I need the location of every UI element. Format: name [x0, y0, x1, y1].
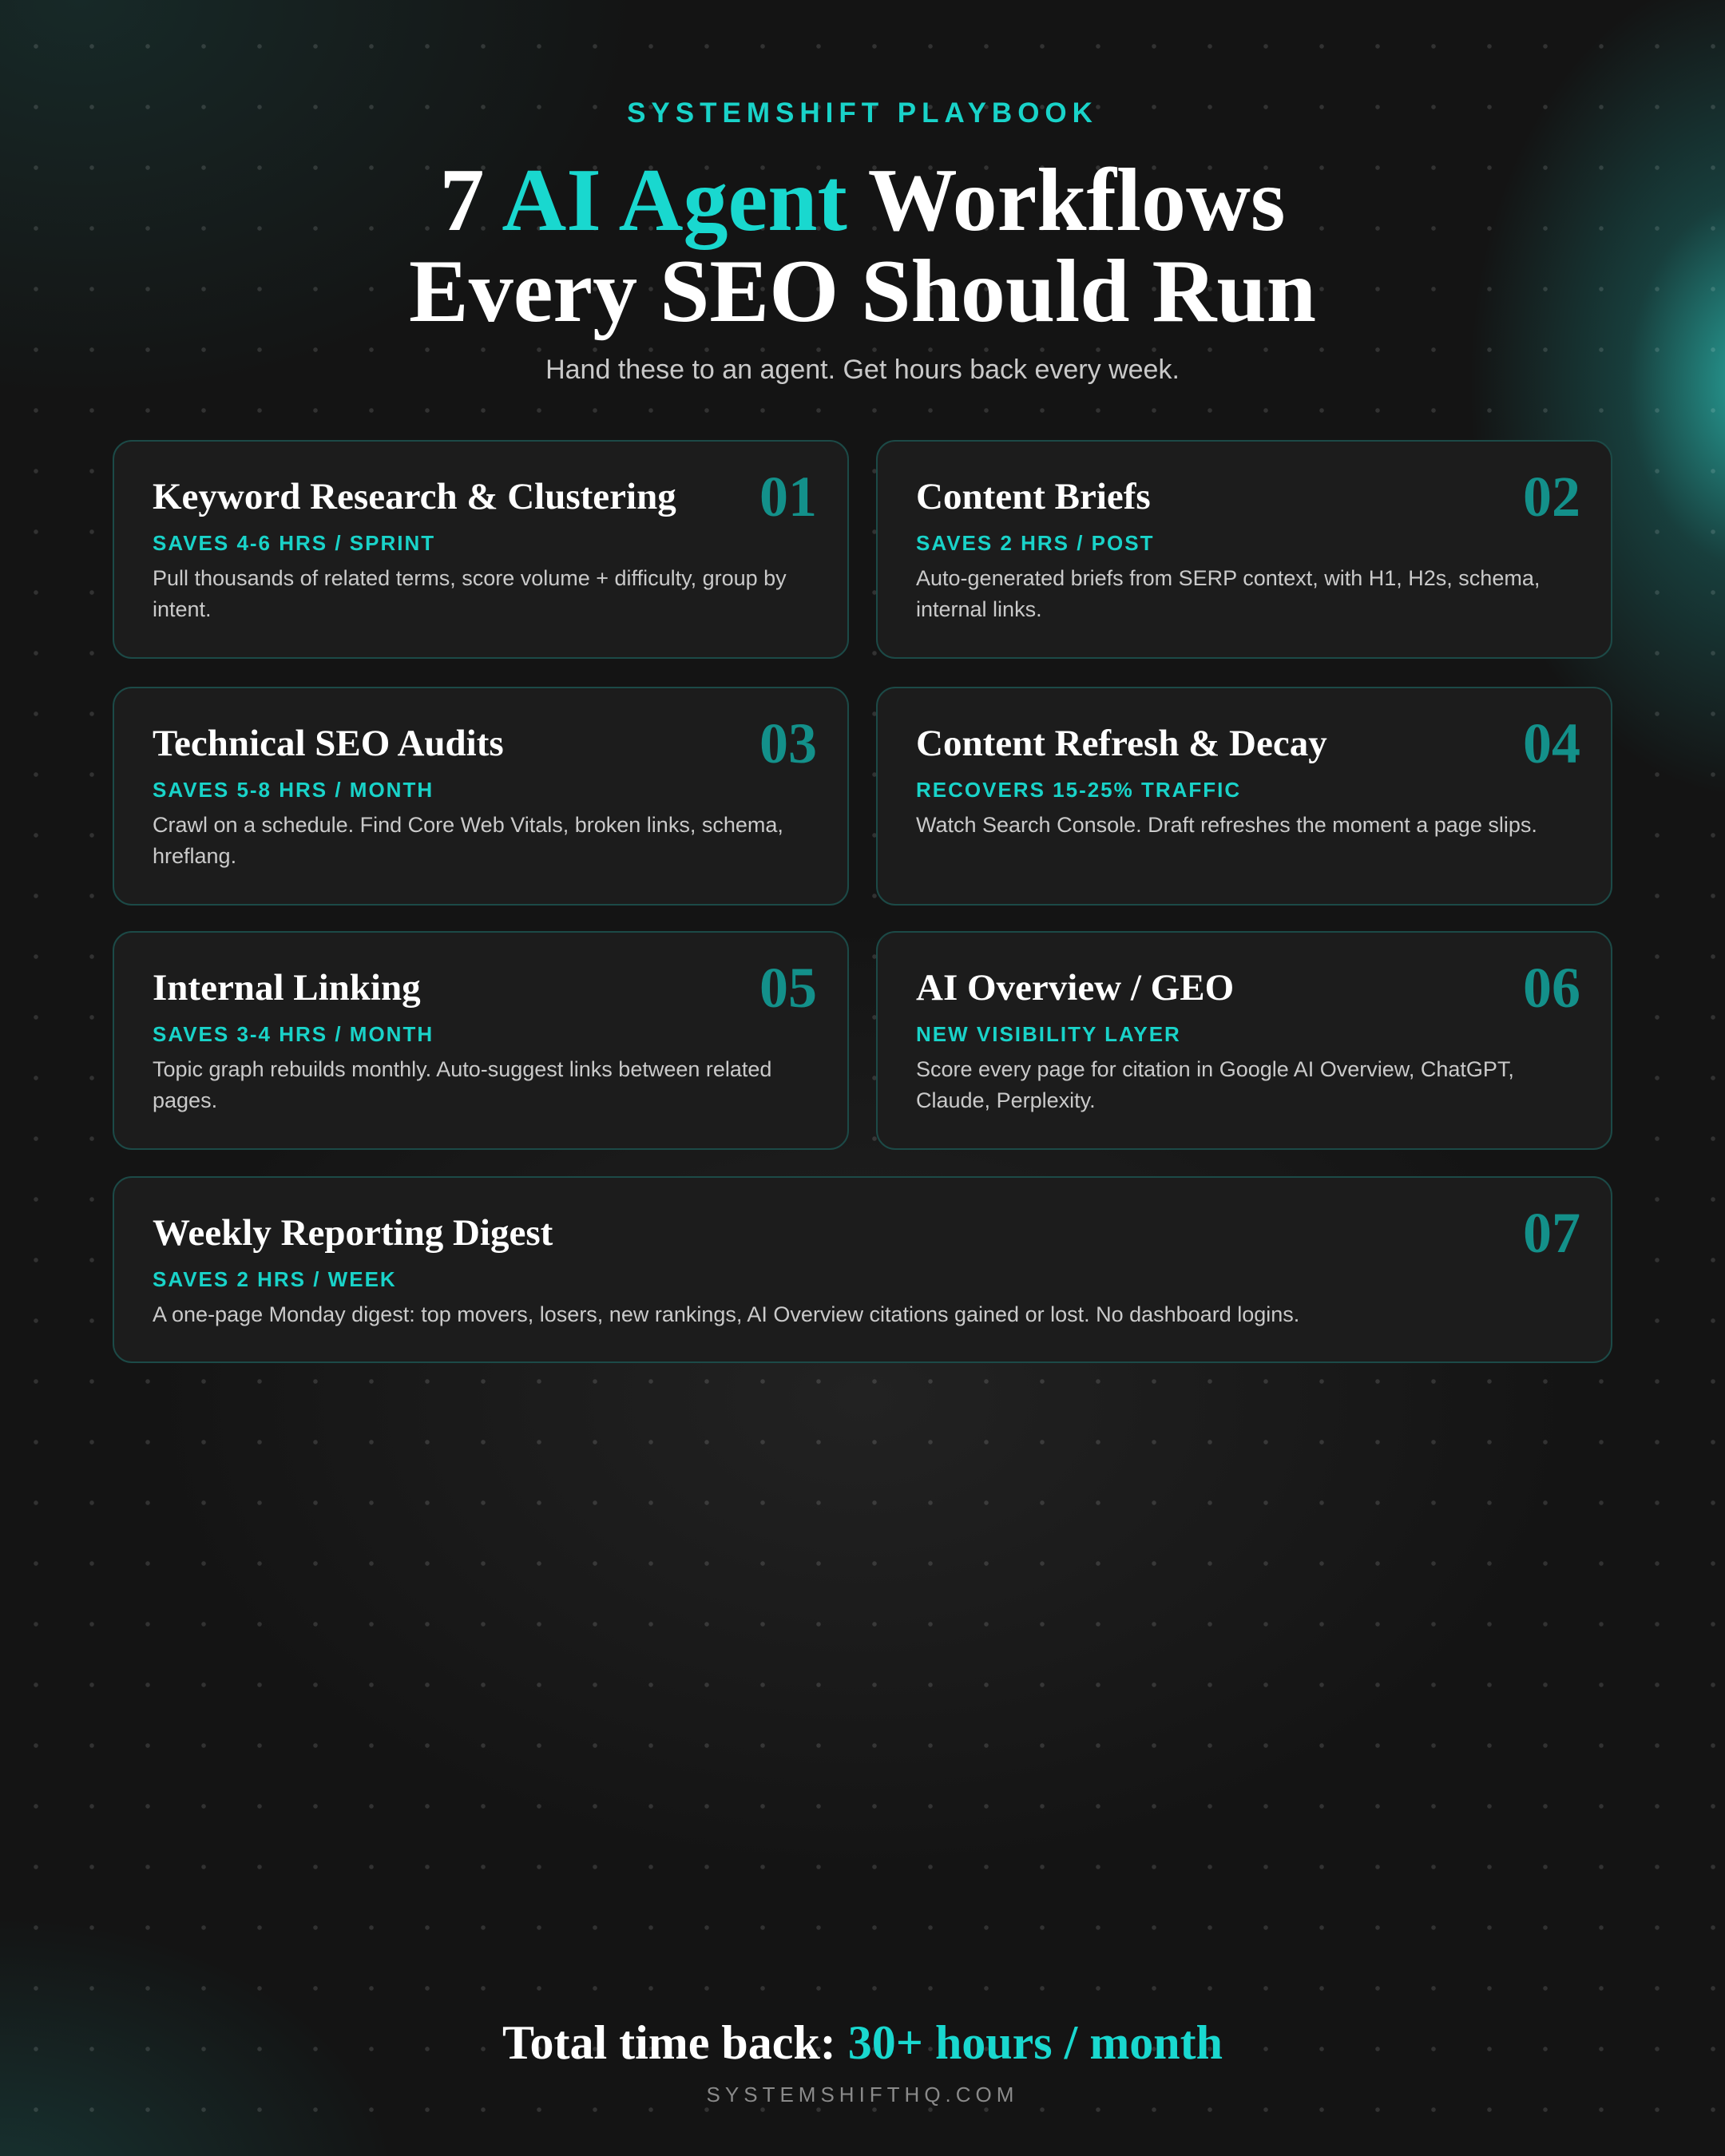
footer total: Total time back: 30+ hours / month: [502, 2016, 1223, 2069]
subtitle: Hand these to an agent. Get hours back every week.: [545, 355, 1180, 385]
card 04: [876, 687, 1612, 906]
card 02: Auto-generated briefs from SERP context, with H1, H2s, schema, internal links.: [916, 566, 1540, 621]
card 04: 04: [1523, 711, 1580, 775]
card 06: [876, 931, 1612, 1150]
card 05: Topic graph rebuilds monthly. Auto-suggest links between related pages.: [153, 1057, 771, 1112]
card 06: NEW VISIBILITY LAYER: [916, 1022, 1181, 1046]
card 03: SAVES 5-8 HRS / MONTH: [153, 778, 434, 802]
card 07: Weekly Reporting Digest: [153, 1212, 553, 1254]
title: Every SEO Should Run: [409, 242, 1316, 341]
card 07: SAVES 2 HRS / WEEK: [153, 1267, 397, 1291]
card 07: A one-page Monday digest: top movers, losers, new rankings, AI Overview citations gained or lost. No dashboard logins.: [153, 1302, 1299, 1326]
card 04: Watch Search Console. Draft refreshes the moment a page slips.: [916, 813, 1537, 837]
title: [409, 151, 1316, 341]
card 04: RECOVERS 15-25% TRAFFIC: [916, 778, 1241, 802]
url: SYSTEMSHIFTHQ.COM: [707, 2083, 1018, 2106]
title: 7 AI Agent Workflows: [439, 151, 1285, 250]
card 03: 03: [759, 711, 817, 775]
card 06: 06: [1523, 956, 1580, 1020]
card 02: SAVES 2 HRS / POST: [916, 531, 1154, 555]
card 03: Technical SEO Audits: [153, 723, 504, 764]
card 02: 02: [1523, 465, 1580, 529]
card 01: Pull thousands of related terms, score volume + difficulty, group by intent.: [153, 566, 787, 621]
card 06: Score every page for citation in Google AI Overview, ChatGPT, Claude, Perplexity.: [916, 1057, 1514, 1112]
card 05: [113, 931, 849, 1150]
card 01: SAVES 4-6 HRS / SPRINT: [153, 531, 435, 555]
card 03: [113, 687, 849, 906]
card 05: SAVES 3-4 HRS / MONTH: [153, 1022, 434, 1046]
card 07: [113, 1176, 1612, 1363]
card 07: 07: [1523, 1201, 1580, 1265]
card 01: 01: [759, 465, 817, 529]
card 02: [876, 440, 1612, 659]
card 06: AI Overview / GEO: [916, 967, 1234, 1009]
card 04: Content Refresh & Decay: [916, 723, 1327, 764]
card 01: Keyword Research & Clustering: [153, 476, 676, 517]
card 02: Content Briefs: [916, 476, 1151, 517]
card 05: Internal Linking: [153, 967, 421, 1009]
card 03: Crawl on a schedule. Find Core Web Vitals, broken links, schema, hreflang.: [153, 813, 783, 868]
card 01: [113, 440, 849, 659]
card 05: 05: [759, 956, 817, 1020]
kicker: SYSTEMSHIFT PLAYBOOK: [627, 97, 1098, 129]
